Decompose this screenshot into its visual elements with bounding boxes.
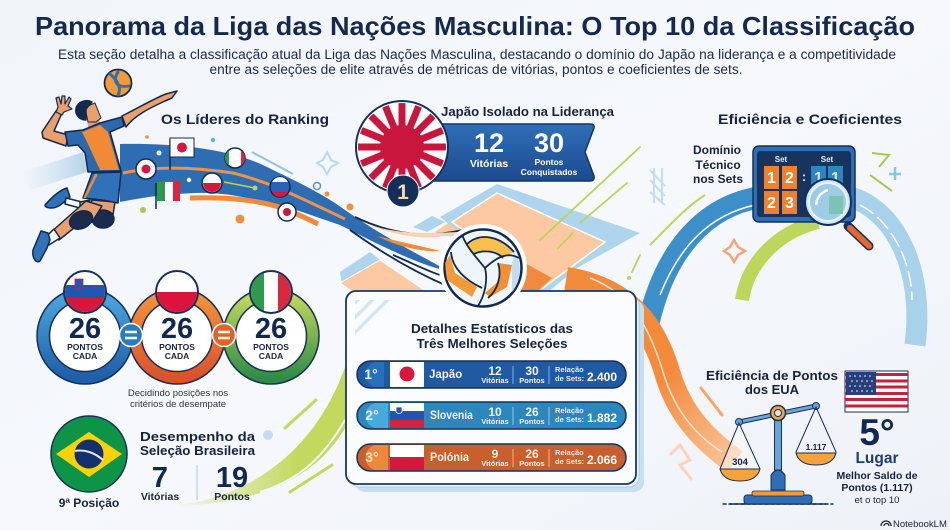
flag: Poland xyxy=(156,271,198,313)
row: Japan: Japão xyxy=(429,369,462,381)
icon: scoreboard: 1 xyxy=(831,170,840,187)
text: 26 points each xyxy=(67,313,289,361)
jersey xyxy=(65,117,124,172)
stat: wins: 12 xyxy=(474,128,504,158)
orange swoosh from ball xyxy=(566,278,735,480)
subtitle xyxy=(58,47,896,77)
flag: Italy on pole xyxy=(156,182,180,209)
row: Poland: 3° xyxy=(365,449,379,465)
row: Poland: 9 xyxy=(492,447,499,461)
flag: Japan small round xyxy=(278,203,296,221)
panel: Japan leadership xyxy=(355,100,615,207)
row: Japan: 30 xyxy=(525,364,539,378)
flag: Slovenia xyxy=(64,271,106,313)
heading: Brazil xyxy=(140,430,256,458)
text: 26 points each: PONTOS xyxy=(67,342,103,352)
right arm xyxy=(122,91,177,127)
row: Japan: de Sets: xyxy=(555,374,584,383)
stat: USA 5th place: Melhor Saldo de xyxy=(836,470,918,482)
row: Japan: 12 xyxy=(488,364,502,378)
text: 26 points each: CADA xyxy=(259,351,283,361)
heading: card xyxy=(411,322,573,351)
text: 26 points each: 26 xyxy=(161,313,193,345)
decorative sports court xyxy=(340,147,640,292)
watermark: NotebookLM: NotebookLM xyxy=(893,519,947,530)
row: Slovenia: 1.882 xyxy=(587,411,617,425)
text: tie-break note: Decidindo posições nos xyxy=(128,388,228,399)
ring: Slovenia xyxy=(37,288,133,384)
row: Japan: 2.400 xyxy=(587,370,617,384)
ribbon xyxy=(430,124,594,181)
text: 26 points each: CADA xyxy=(73,351,97,361)
stat: wins xyxy=(141,462,179,503)
stat: points: 30 xyxy=(534,128,564,158)
heading: Brazil: Seleção Brasileira xyxy=(140,444,256,458)
stat: points: Pontos xyxy=(214,491,250,503)
text: technical domain: Domínio xyxy=(693,143,741,157)
heading: leaders: Os Líderes do Ranking xyxy=(161,111,329,127)
icon: scoreboard: : xyxy=(802,169,806,184)
row: Japan: 1° xyxy=(364,366,378,382)
heading: USA efficiency: dos EUA xyxy=(745,383,799,397)
flag: Slovenia round xyxy=(270,177,290,197)
rank badge xyxy=(387,175,419,207)
text: technical domain xyxy=(693,143,743,186)
row: Japan: Vitórias xyxy=(481,376,509,385)
panel: Brazil xyxy=(51,416,256,510)
row: Slovenia: Relação xyxy=(555,406,584,415)
stat: points: Conquistados xyxy=(521,167,578,177)
row: Japan xyxy=(357,361,626,388)
group: tie of 26 points xyxy=(37,271,319,384)
row: Slovenia: de Sets: xyxy=(555,415,584,424)
icon: scoreboard: 3 xyxy=(785,195,794,212)
flag: Italy round xyxy=(225,148,245,168)
shorts xyxy=(83,172,121,203)
row: Japan: Pontos xyxy=(519,376,545,385)
row: Japan: Relação xyxy=(555,365,584,374)
stat: USA 5th place: Pontos (1.117) xyxy=(841,482,913,494)
subtitle: entre as seleções de elite através de métricas de vitórias, pontos e coeficientes de sets. xyxy=(210,62,742,77)
heading: card: Três Melhores Seleções xyxy=(416,337,568,351)
text: 26 points each: 26 xyxy=(69,313,101,345)
row: Poland: 2.066 xyxy=(587,453,617,467)
heading: USA efficiency xyxy=(706,369,838,397)
sparkles xyxy=(314,152,901,262)
row: Slovenia xyxy=(357,402,626,429)
stat: wins: Vitórias xyxy=(470,158,508,170)
icon: scoreboard: 1 xyxy=(814,170,823,187)
icon: equals orange xyxy=(212,324,236,346)
row: Slovenia: 2° xyxy=(365,407,379,423)
icon: balance scale xyxy=(720,402,836,504)
row: Slovenia: 10 xyxy=(488,405,502,419)
icon: balance scale: 304 xyxy=(732,457,749,468)
label: 9th place: 9ª Posição xyxy=(59,496,119,510)
icon: scoreboard xyxy=(753,146,869,246)
ring: Italy xyxy=(223,288,319,384)
flag: Japan round xyxy=(136,159,156,179)
row: Poland: de Sets: xyxy=(555,457,584,466)
row: Slovenia: Vitórias xyxy=(481,417,509,426)
row: Slovenia: Pontos xyxy=(519,417,545,426)
rear leg xyxy=(45,188,70,208)
row: Slovenia: Slovenia xyxy=(430,410,474,422)
arches right xyxy=(648,168,917,345)
row: Poland: Polónia xyxy=(430,452,470,464)
icon: equals blue xyxy=(120,324,142,346)
text: 26 points each: 26 xyxy=(255,313,287,345)
stat: wins xyxy=(470,128,508,170)
flag: Japan on pole xyxy=(170,138,194,170)
icon: large volleyball xyxy=(439,224,527,312)
icon: small ball xyxy=(104,70,132,96)
row: Poland: Relação xyxy=(555,448,584,457)
icon: scoreboard: 2 xyxy=(785,170,794,187)
rising sun flag xyxy=(355,100,449,194)
text: technical domain: nos Sets xyxy=(693,172,743,186)
panel: statistics card xyxy=(346,291,644,492)
stat: points xyxy=(521,128,578,177)
flag: Brazil xyxy=(51,416,127,492)
icon: magnifier xyxy=(805,179,869,246)
ranking swoosh with flags xyxy=(23,135,463,285)
heading: Brazil: Desempenho da xyxy=(140,430,256,444)
heading: card: Detalhes Estatísticos das xyxy=(411,322,573,336)
stat: points: 19 xyxy=(216,462,248,494)
text: tie-break note xyxy=(128,388,228,410)
front leg xyxy=(50,201,102,240)
icon: scoreboard: 2 xyxy=(767,195,776,212)
heading: efficiency: Eficiência e Coeficientes xyxy=(718,111,902,127)
flag: Italy xyxy=(250,271,292,313)
icon: volleyball player xyxy=(33,70,177,262)
row: Poland: Pontos xyxy=(519,459,545,468)
stat: points: Pontos xyxy=(535,157,564,167)
stat: USA 5th place: Lugar xyxy=(855,450,899,467)
row: Poland xyxy=(357,444,626,471)
stat: wins: 7 xyxy=(152,462,168,494)
ring: Poland xyxy=(129,288,225,384)
row: Poland: 26 xyxy=(525,447,539,461)
icon: scoreboard: Set xyxy=(775,155,788,164)
row: Slovenia: 26 xyxy=(525,405,539,419)
stat: USA 5th place: et o top 10 xyxy=(855,495,899,506)
icon: balance scale: 1.117 xyxy=(806,442,827,452)
left arm xyxy=(42,111,68,146)
row: Poland: Vitórias xyxy=(481,459,509,468)
green swoosh bottom left xyxy=(170,345,352,506)
rank badge: 1 xyxy=(397,181,409,204)
text: 26 points each: PONTOS xyxy=(159,342,195,352)
flag: Poland round xyxy=(202,173,222,193)
flag: USA xyxy=(845,371,908,412)
text: technical domain: Técnico xyxy=(695,158,741,172)
title: Panorama da Liga das Nações Masculina: O Top 10 da Classificação xyxy=(35,11,915,41)
stat: wins: Vitórias xyxy=(141,491,179,503)
icon: scoreboard: 1 xyxy=(767,170,776,187)
heading: Japan: Japão Isolado na Liderança xyxy=(441,104,615,119)
text: tie-break note: critérios de desempate xyxy=(130,399,226,410)
neck and head xyxy=(87,116,100,127)
icon: scoreboard: Set xyxy=(821,155,834,164)
text: 26 points each: CADA xyxy=(165,351,189,361)
heading: USA efficiency: Eficiência de Pontos xyxy=(706,369,838,383)
text: 26 points each: PONTOS xyxy=(253,342,289,352)
subtitle: Esta seção detalha a classificação atual da Liga das Nações Masculina, destacando o domínio do Japão na liderança e a competitividade xyxy=(58,47,896,62)
stat: USA 5th place xyxy=(836,412,918,506)
stat: USA 5th place: 5° xyxy=(859,412,895,453)
